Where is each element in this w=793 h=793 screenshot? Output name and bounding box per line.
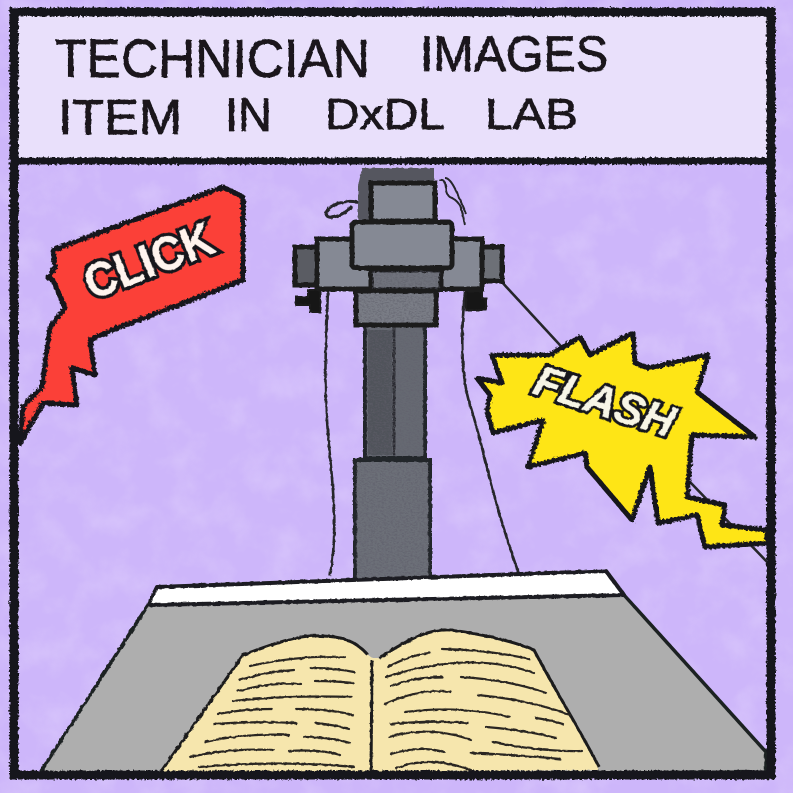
click label: CLICK	[77, 212, 222, 310]
upper housing	[371, 183, 435, 221]
white table edge	[148, 571, 624, 605]
lens collar	[371, 270, 441, 290]
heading panel	[14, 12, 771, 161]
table	[38, 571, 766, 776]
upper column	[365, 322, 425, 458]
wires	[325, 178, 770, 576]
middle housing	[352, 222, 452, 268]
title text: IMAGES	[420, 26, 608, 82]
lower column	[355, 460, 430, 580]
title text: LAB	[485, 90, 578, 139]
burst shape	[20, 187, 243, 443]
flash burst	[477, 333, 767, 547]
title text: ITEM	[58, 91, 182, 145]
title text: TECHNICIAN	[55, 29, 370, 89]
open book	[160, 630, 599, 773]
column top	[358, 168, 434, 221]
right clip	[466, 291, 486, 310]
left cap	[295, 247, 319, 285]
burst shape	[477, 333, 767, 547]
title text: IN	[225, 88, 272, 141]
title text	[55, 26, 608, 145]
book pages	[160, 630, 599, 773]
lens block	[356, 291, 436, 325]
right cap	[482, 247, 502, 281]
camera	[295, 183, 502, 325]
flash label: FLASH	[528, 356, 682, 448]
left clip	[296, 290, 320, 312]
book outline	[160, 630, 599, 773]
camera body	[317, 239, 482, 289]
copy stand column	[355, 168, 434, 580]
book text lines	[190, 649, 582, 770]
title text: DxDL	[325, 90, 445, 139]
table surface	[38, 595, 766, 776]
click speech burst	[20, 187, 243, 443]
